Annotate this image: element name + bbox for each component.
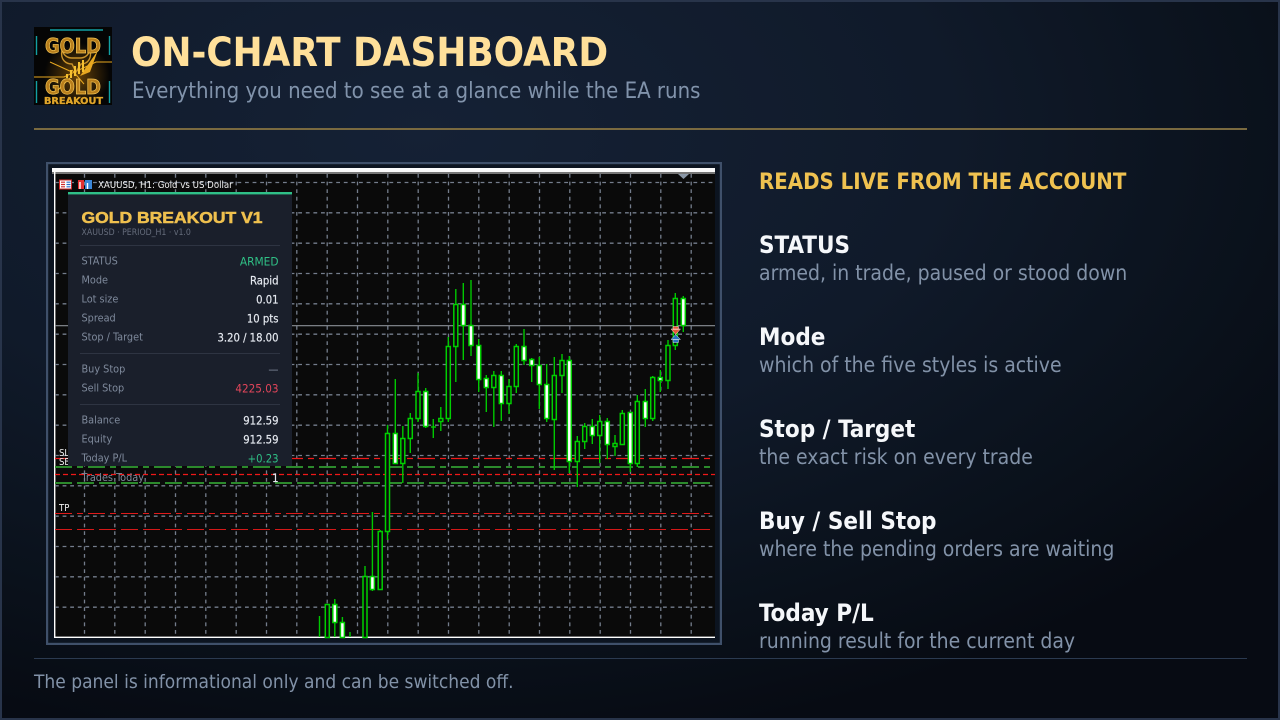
pending order rows: 4225.03 [235,382,278,396]
item: stop target: the exact risk on every trade [759,445,1033,469]
trade marker: buy arrow [671,334,680,342]
item: buy sell stop: where the pending orders are waiting [759,537,1114,561]
status rows [82,254,278,344]
status rows: STATUS [82,254,118,268]
item: stop target [759,415,1033,469]
level labels: TP [58,503,69,514]
candlestick bodies: bullish hollow [325,298,677,638]
icon: gold breakout logo [34,27,112,105]
panel heading: GOLD BREAKOUT V1 [82,210,263,227]
item: mode: Mode [759,323,825,351]
item: buy sell stop [759,507,1114,561]
gold divider [34,128,1247,130]
item: mode: which of the five styles is active [759,353,1062,377]
pending order rows: Buy Stop [82,362,125,376]
symbol bar: XAUUSD, H1: Gold vs US Dollar [98,180,233,191]
account rows: 912.59 [243,434,278,446]
level labels [58,448,70,514]
status rows: Mode [82,274,108,286]
subtitle: Everything you need to see at a glance while the EA runs [132,79,700,104]
icon: gold breakout logo: GOLD [45,75,101,99]
panel: chart screenshot [46,162,722,645]
item: today p/l: running result for the current day [759,629,1075,653]
pending order rows: Sell Stop [82,382,124,394]
status rows: Spread [82,312,116,324]
panel subheading: XAUUSD · PERIOD_H1 · v1.0 [82,228,191,238]
item: mode [759,323,1062,377]
candlestick bodies: bearish white [333,298,685,638]
account rows: Today P/L [80,452,128,464]
pending order rows [82,362,278,396]
item: status: armed, in trade, paused or stood down [759,261,1127,285]
section heading: READS LIVE FROM THE ACCOUNT [759,170,1126,195]
status rows: Stop / Target [82,330,143,344]
icon: gold breakout logo: GOLD [45,34,101,58]
level labels: SE [59,457,70,468]
title: ON-CHART DASHBOARD [131,30,608,76]
status rows: Rapid [250,274,278,288]
item: buy sell stop: Buy / Sell Stop [759,507,936,535]
chart indicator triangle [678,174,689,179]
item: today p/l [759,599,1075,653]
grid lines [55,174,715,636]
status rows: 0.01 [256,294,278,306]
account rows: Equity [82,432,112,446]
item: today p/l: Today P/L [759,599,874,627]
trades today row [80,471,278,485]
candlestick wicks [320,280,683,637]
account rows: Balance [82,414,120,426]
status rows: Lot size [82,292,118,306]
trades today row: 1 [272,472,278,485]
footer rule [34,658,1247,659]
panel: EA dashboard [68,192,292,466]
trades today row: Trades Today [80,471,144,484]
account rows: 912.59 [243,414,278,428]
footer note: The panel is informational only and can be switched off. [34,671,514,693]
price line [55,325,715,327]
item: status [759,231,1127,285]
status rows: ARMED [240,254,278,268]
account rows [80,414,278,466]
stop and target levels [55,458,715,530]
item: stop target: Stop / Target [759,415,915,443]
account rows: +0.23 [248,452,278,466]
trade marker: sell arrow [671,326,680,334]
status rows: 3.20 / 18.00 [218,332,278,344]
level labels: SL [59,448,69,459]
item: status: STATUS [759,231,850,259]
pending order rows: — [268,364,278,376]
status rows: 10 pts [247,312,278,326]
